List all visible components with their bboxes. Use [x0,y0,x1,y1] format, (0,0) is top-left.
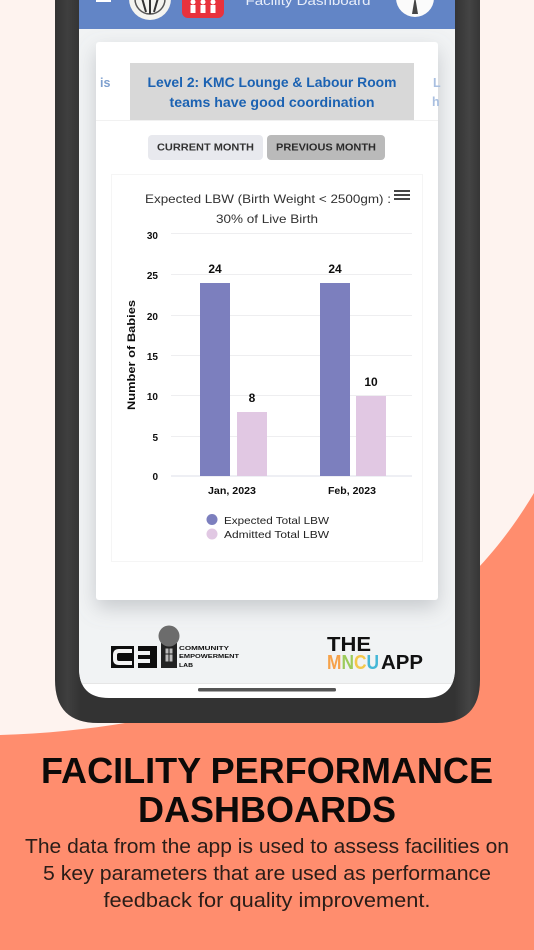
phone frame [55,0,480,723]
heading [41,750,493,830]
footer logo: Community Empowerment Lab [111,626,240,669]
y axis labels [147,231,158,483]
legend: Expected Total LBW [224,515,329,527]
heading: DASHBOARDS [138,789,396,830]
bar value labels [208,262,378,405]
footer logo: The MNCU App: APP [381,652,423,674]
description text: 5 key parameters that are used as performance [43,863,491,885]
next tab fragment: L [433,76,441,90]
description text [25,836,509,912]
bars: Jan 2023 [200,283,267,476]
y axis labels: 0 [152,472,158,483]
active tab: Level 2: KMC Lounge & Labour Room [148,75,396,90]
footer logo: Community Empowerment Lab: EMPOWERMENT [179,654,240,660]
icon: emblem logo [129,0,171,20]
x axis labels: Jan, 2023 [208,486,256,497]
description text: The data from the app is used to assess facilities on [25,836,509,858]
active tab: teams have good coordination [170,95,374,110]
button: previous month [267,135,385,160]
bar value labels: 10 [364,375,378,389]
previous tab fragment: is [100,76,110,90]
footer logo: The MNCU App [327,634,423,674]
button: current month [148,135,263,160]
y axis labels: 10 [147,392,158,403]
icon: family logo [182,0,224,18]
app header bar [79,0,455,29]
x axis labels: Feb, 2023 [328,486,376,497]
footer logo: Community Empowerment Lab: LAB [179,663,193,669]
y axis labels: 5 [152,433,158,444]
heading: FACILITY PERFORMANCE [41,750,493,791]
chart title: 30% of Live Birth [216,212,318,226]
bar value labels: 24 [208,262,222,276]
footer logo: Community Empowerment Lab: COMMUNITY [179,646,229,652]
bar value labels: 24 [328,262,342,276]
gridlines [171,234,412,436]
footer logo: The MNCU App: MNCU [327,652,379,674]
legend [206,514,329,541]
bars: Feb 2023 [320,283,386,476]
icon: chart menu [394,190,410,200]
y axis title: Number of Babies [126,300,138,410]
description text: feedback for quality improvement. [104,890,430,912]
x axis labels [208,486,376,497]
y axis labels: 25 [147,271,158,282]
y axis labels: 30 [147,231,158,242]
phone screen [79,0,455,698]
icon: menu [96,0,111,2]
next tab fragment [432,76,441,109]
phone mockup [55,0,480,723]
legend: Admitted Total LBW [224,529,329,541]
button: current month: CURRENT MONTH [157,142,254,154]
chart title [145,192,391,226]
home indicator [198,688,336,692]
chart panel [112,174,422,562]
footer logo: The MNCU App: THE [327,634,371,656]
y axis labels: 20 [147,312,158,323]
icon: profile avatar [396,0,434,17]
y axis labels: 15 [147,352,158,363]
chart title: Expected LBW (Birth Weight < 2500gm) : [145,192,391,206]
active tab [130,63,414,120]
button: previous month: PREVIOUS MONTH [276,142,376,154]
dashboard card [96,42,441,600]
next tab fragment: h [432,95,440,109]
bar value labels: 8 [249,391,256,405]
